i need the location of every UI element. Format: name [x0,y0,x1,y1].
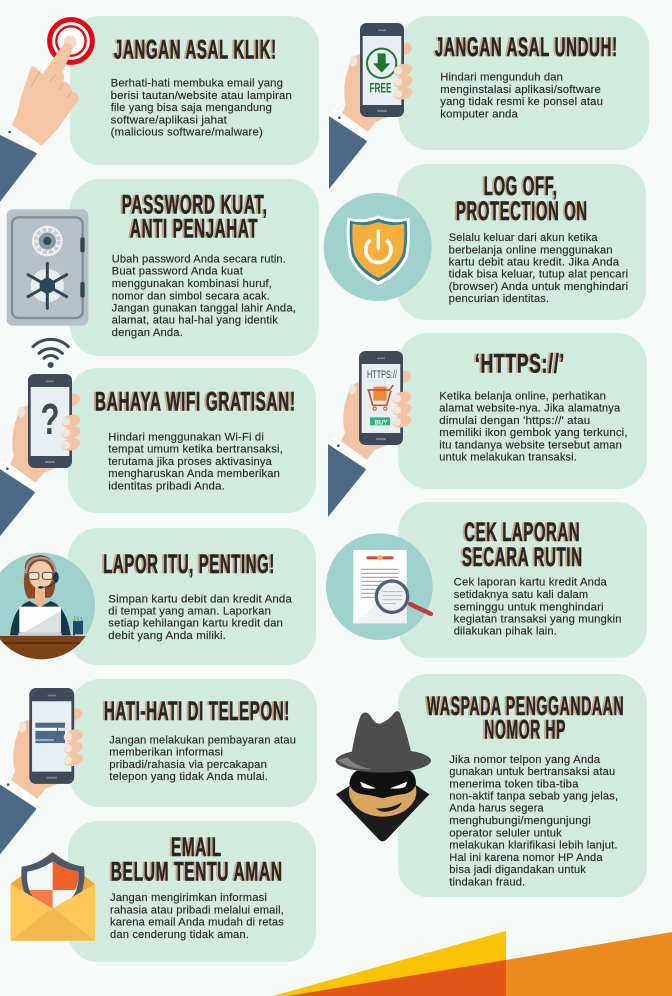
icon: safe [7,209,88,326]
text block: Waspada Penggandaan Nomor HP: tindakan fraud. [449,876,525,888]
text block: Waspada Penggandaan Nomor HP: non-aktif tanpa sebab yang jelas, [449,791,618,803]
text block: Jangan Asal Klik: berisi tautan/website atau lampiran [111,90,292,102]
text block: Email Belum Tentu Aman: Jangan mengirimkan informasi [110,892,267,904]
text block: Jangan Asal Unduh: komputer anda [440,108,519,120]
text block: HTTPS: untuk melakukan transaksi. [439,452,577,464]
download symbol [367,49,396,78]
icon: hand holding phone with free download [329,23,414,189]
text block: HTTPS: alamat website-nya. Jika alamatnya [439,403,621,415]
shopping cart [367,385,393,425]
text block: Jangan Asal Unduh [440,72,603,120]
text block: HTTPS: dimulai dengan 'https://' atau [439,415,590,427]
panel: Lapor Itu Penting [68,528,316,665]
heading: Hati-Hati di Telepon: HATI-HATI DI TELEPON! [104,696,290,726]
text block: Email Belum Tentu Aman: karena email Anda mudah di retas [110,917,284,929]
text block: Waspada Penggandaan Nomor HP: Anda harus segera [449,803,544,815]
panel: Log Off, Protection On [397,164,646,320]
text block: Password Kuat: alamat, atau hal-hal yang identik [112,315,278,327]
heading: Cek Laporan Secara Rutin: SECARA RUTIN [462,542,583,572]
text block: Password Kuat: Ubah password Anda secara rutin. [112,253,286,265]
icon: hand holding phone with credit card [0,688,84,857]
heading: Cek Laporan Secara Rutin: CEK LAPORAN [464,517,580,547]
icon: hand holding phone with question mark: ? [40,395,60,444]
text block: HTTPS [439,390,628,464]
text block: Waspada Penggandaan Nomor HP [449,754,618,888]
icon: report with magnifying glass [326,533,433,640]
panel: Jangan Asal Klik [70,16,319,165]
text block: Waspada Penggandaan Nomor HP: operator seluler untuk [449,827,562,839]
text block: Lapor Itu Penting: debit yang Anda miliki. [108,630,226,642]
text block: Cek Laporan Secara Rutin [454,577,622,638]
text block: Cek Laporan Secara Rutin: seminggu untuk menghindari [454,601,604,613]
text block: Waspada Penggandaan Nomor HP: bisa jadi digandakan untuk [449,864,586,876]
icon: customer service agent [0,552,95,660]
icon: hand holding phone with shopping cart: HTTPS:// [367,369,398,381]
text block: Hati-Hati di Telepon: Jangan melakukan pembayaran atau [109,734,296,746]
text block: Email Belum Tentu Aman: dan cenderung tidak aman. [110,929,249,941]
text block: Lapor Itu Penting: Simpan kartu debit dan kredit Anda [108,593,293,605]
text block: Log Off, Protection On: tidak bisa keluar, tutup alat pencari [449,269,628,281]
text block: Log Off, Protection On: (browser) Anda untuk menghindari [449,281,628,293]
text block: Cek Laporan Secara Rutin: Cek laporan kartu kredit Anda [454,577,608,589]
text block: Hati-Hati di Telepon: telepon yang tidak Anda mulai. [109,771,268,783]
icon: hand holding phone with shopping cart [328,351,413,517]
text block: Jangan Asal Unduh: menginstalasi aplikasi/software [440,84,601,96]
text block: Waspada Penggandaan Nomor HP: menerima token tiba-tiba [449,778,579,790]
footer decoration: angled colour shapes [273,931,672,996]
panel: Hati-Hati di Telepon [70,679,317,807]
heading: Email Belum Tentu Aman: EMAIL [171,832,222,862]
heading: Waspada Penggandaan Nomor HP: NOMOR HP [484,714,566,744]
text block: Bahaya Wifi Gratisan: identitas pribadi Anda. [108,480,225,492]
panel: Email Belum Tentu Aman [68,821,316,962]
icon: shield with power symbol [324,193,432,301]
text block: Jangan Asal Unduh: Hindari mengunduh dan [440,72,563,84]
heading: Log Off, Protection On: LOG OFF, [484,171,558,201]
text block: Password Kuat [112,253,296,339]
heading: Password Kuat [122,189,268,244]
text block: Email Belum Tentu Aman: rahasia atau pribadi melalui email, [110,904,284,916]
panel: Password Kuat [70,179,319,356]
text block: Bahaya Wifi Gratisan: Hindari menggunakan Wi-Fi di [108,431,264,443]
text block: Password Kuat: Jangan gunakan tanggal lahir Anda, [112,302,296,314]
text block: Waspada Penggandaan Nomor HP: gunakan untuk bertransaksi atau [449,766,615,778]
text block: Cek Laporan Secara Rutin: dilakukan pihak lain. [454,626,557,638]
panel: Cek Laporan Secara Rutin [398,502,647,658]
heading: Log Off, Protection On [456,171,588,226]
text block: Password Kuat: menggunakan kombinasi huruf, [112,278,272,290]
text block: Lapor Itu Penting: di tempat yang aman. Laporkan [108,606,271,618]
heading: Waspada Penggandaan Nomor HP [427,691,624,744]
text block: Waspada Penggandaan Nomor HP: Hal ini karena nomor HP Anda [449,852,603,864]
heading: Email Belum Tentu Aman [111,832,283,887]
text block: Log Off, Protection On: Selalu keluar dari akun ketika [449,232,598,244]
panel: Waspada Penggandaan Nomor HP [398,674,647,897]
icon: wifi signal [33,339,68,368]
text block: Lapor Itu Penting: setiap kehilangan kartu kredit dan [108,618,283,630]
heading: Cek Laporan Secara Rutin [462,517,583,572]
text block: Jangan Asal Klik: (malicious software/malware) [111,127,263,139]
text block: Log Off, Protection On: kartu debit atau kredit. Jika Anda [449,257,620,269]
heading: Jangan Asal Klik: JANGAN ASAL KLIK! [114,34,277,64]
icon: hand holding phone with question mark [0,374,82,540]
text block: Email Belum Tentu Aman [110,892,284,941]
icon: hand holding phone with shopping cart: BUY [374,420,388,426]
panel: Jangan Asal Unduh [399,16,649,150]
text block: Password Kuat: dengan Anda. [112,327,183,339]
icon: pointing hand on red target [0,20,92,202]
icon: hand holding phone with free download: FREE [370,80,392,96]
text block: HTTPS: Ketika belanja online, perhatikan [439,390,606,402]
text block: Jangan Asal Klik: software/aplikasi jahat [111,114,228,126]
heading: Email Belum Tentu Aman: BELUM TENTU AMAN [111,857,283,887]
text block: Bahaya Wifi Gratisan [108,431,283,492]
text block: Jangan Asal Klik: Berhati-hati membuka email yang [111,78,283,90]
text block: Jangan Asal Klik: file yang bisa saja mengandung [111,102,272,114]
text block: Waspada Penggandaan Nomor HP: melakukan klarifikasi lebih lanjut. [449,840,618,852]
text block: Jangan Asal Unduh: yang tidak resmi ke ponsel atau [440,96,603,108]
text block: HTTPS: itu tandanya website tersebut aman [439,439,622,451]
text block: Hati-Hati di Telepon [109,734,296,783]
text block: Log Off, Protection On [449,232,628,305]
text block: Password Kuat: Buat password Anda kuat [112,266,244,278]
panel: HTTPS [398,333,647,489]
text block: Jangan Asal Klik [111,78,292,139]
text block: Bahaya Wifi Gratisan: tempat umum ketika bertransaksi, [108,444,283,456]
heading: Lapor Itu Penting: LAPOR ITU, PENTING! [103,549,275,579]
text block: Bahaya Wifi Gratisan: mengharuskan Anda memberikan [108,468,280,480]
text block: Hati-Hati di Telepon: pribadi/rahasia via percakapan [109,759,267,771]
text block: Waspada Penggandaan Nomor HP: Jika nomor telpon yang Anda [449,754,601,766]
text block: Cek Laporan Secara Rutin: setidaknya satu kali dalam [454,589,588,601]
heading: Password Kuat: ANTI PENJAHAT [130,214,258,244]
heading: HTTPS: ‘HTTPS://’ [475,349,565,379]
text block: Password Kuat: nomor dan simbol secara acak. [112,290,270,302]
heading: Password Kuat: PASSWORD KUAT, [122,189,268,219]
icon: masked hacker with hat [336,711,431,841]
text block: HTTPS: memiliki ikon gembok yang terkunci, [439,427,628,439]
text block: Log Off, Protection On: pencurian identitas. [449,293,549,305]
credit card on phone screen [35,723,65,743]
text block: Hati-Hati di Telepon: memberikan informasi [109,747,223,759]
panel: Bahaya Wifi Gratisan [68,368,316,513]
heading: Bahaya Wifi Gratisan: BAHAYA WIFI GRATISAN! [95,387,296,417]
text block: Cek Laporan Secara Rutin: kegiatan transaksi yang mungkin [454,614,622,626]
text block: Waspada Penggandaan Nomor HP: menghubungi/mengunjungi [449,815,591,827]
icon: envelope with shield [11,852,95,941]
text block: Lapor Itu Penting [108,593,293,642]
text block: Log Off, Protection On: berbelanja online menggunakan [449,244,613,256]
text block: Bahaya Wifi Gratisan: terutama jika proses aktivasinya [108,456,273,468]
